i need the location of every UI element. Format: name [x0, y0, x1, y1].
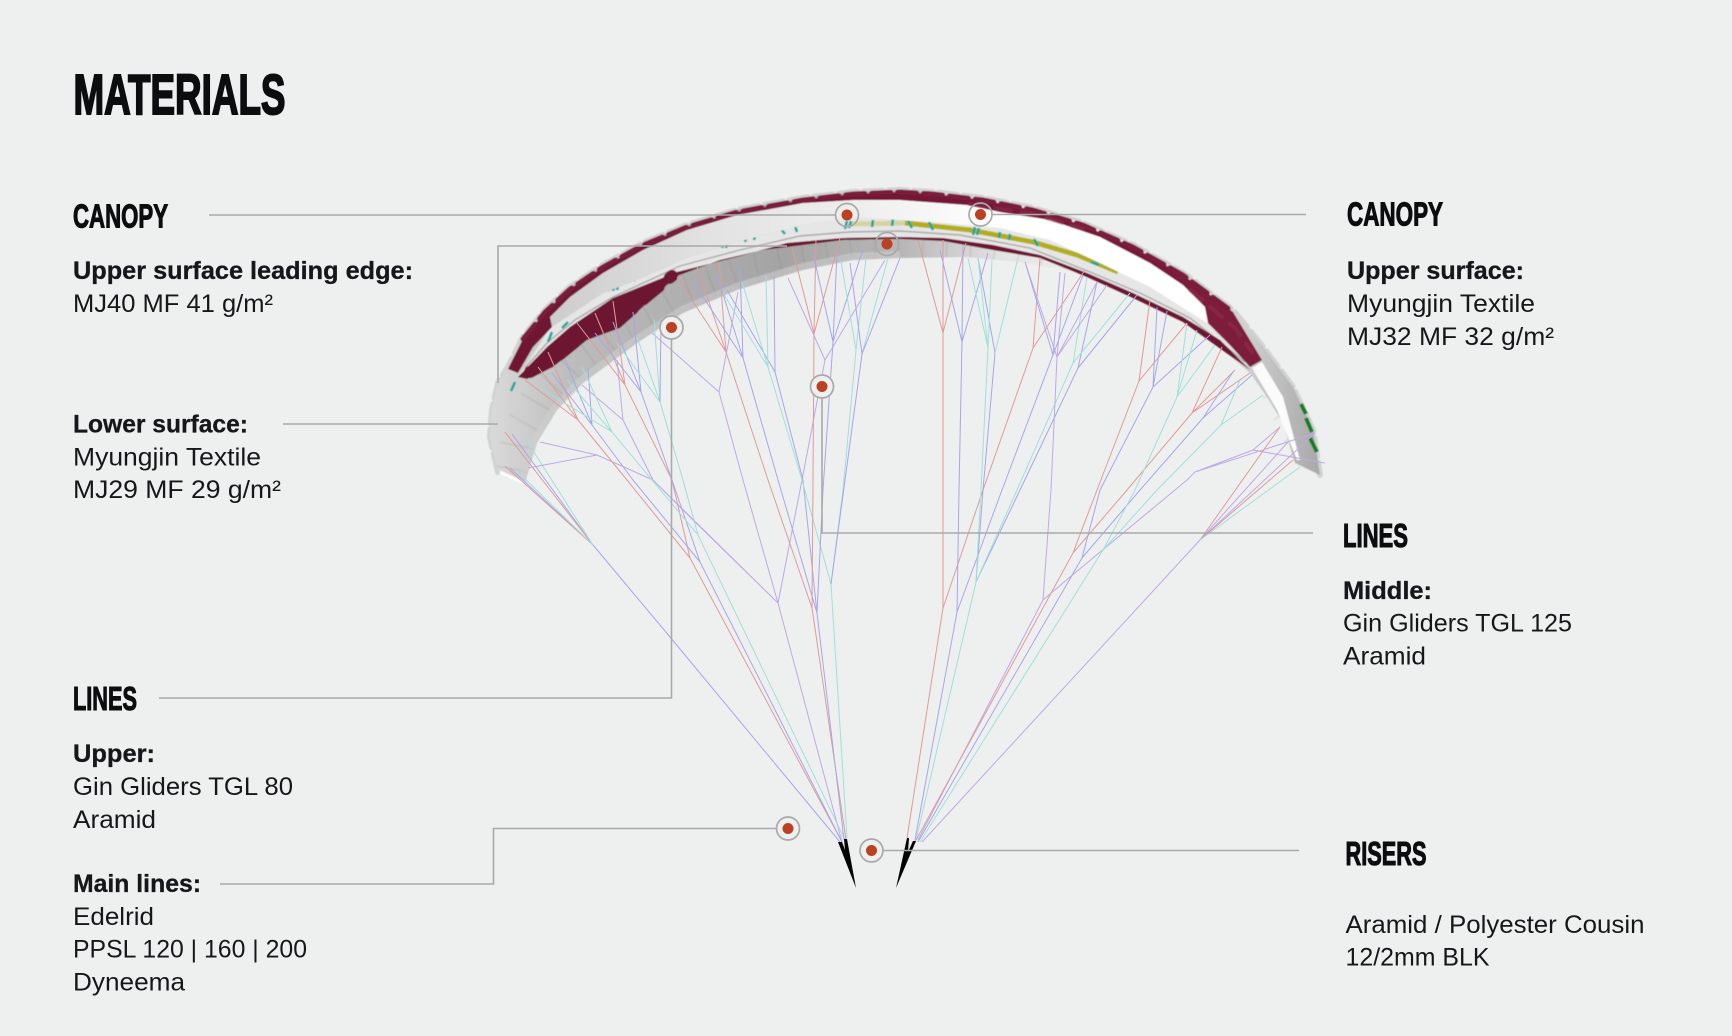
leader lines: [159, 214, 1313, 884]
text: risers material: Aramid / Polyester Cousin: [1346, 911, 1644, 939]
text: upper surface leading edge: Upper surface leading edge:: [73, 257, 413, 285]
lines: right group: [907, 240, 1325, 842]
text: main lines: Dyneema: [73, 968, 185, 996]
text: upper surface: Myungjin Textile: [1347, 290, 1535, 318]
marker: canopy leading edge: [836, 204, 858, 226]
text: lower surface: Myungjin Textile: [73, 444, 261, 472]
text: lower surface: MJ29 MF 29 g/m²: [73, 476, 281, 504]
panel: canopy left: [73, 198, 413, 504]
text: main lines: PPSL 120 | 160 | 200: [73, 936, 307, 964]
upper surface white panel: [550, 200, 1209, 328]
panel: risers: [1346, 835, 1644, 972]
marker: canopy upper surface: [969, 203, 992, 226]
paraglider canopy: [490, 190, 1320, 483]
heading: lines left: LINES: [73, 680, 137, 717]
canopy scalloped rim: [490, 190, 1320, 475]
text: upper lines: Gin Gliders TGL 80: [73, 773, 293, 801]
heading: canopy right: CANOPY: [1347, 196, 1443, 232]
teal marks: [511, 219, 1099, 391]
heading: risers: RISERS: [1346, 835, 1426, 872]
marker: risers: [860, 839, 883, 862]
text: main lines: Edelrid: [73, 903, 154, 931]
text: upper surface leading edge: MJ40 MF 41 g/m²: [73, 290, 273, 318]
title: MATERIALS: [74, 63, 286, 127]
marker: upper lines: [660, 316, 683, 339]
text: risers material: [1346, 911, 1644, 972]
panel: canopy right: [1347, 196, 1554, 351]
lines: left group: [505, 238, 900, 842]
wing tip green marks: [1301, 404, 1317, 452]
text: upper lines: Aramid: [73, 806, 156, 834]
text: risers material: 12/2mm BLK: [1346, 944, 1490, 972]
underside lower edge highlight: [530, 251, 900, 448]
maroon highlights right: [970, 204, 1252, 352]
left riser: [838, 839, 856, 888]
text: main lines: Main lines:: [73, 870, 201, 898]
lower maroon band: [518, 237, 1250, 379]
panel: lines left: [73, 680, 307, 996]
text: upper lines: [73, 740, 293, 834]
heading: canopy left: CANOPY: [73, 198, 168, 234]
text: upper surface: MJ32 MF 32 g/m²: [1347, 323, 1554, 351]
wing tip white strip right: [1252, 362, 1300, 460]
text: middle lines: Gin Gliders TGL 125: [1343, 610, 1572, 638]
marker: middle lines: [810, 375, 834, 398]
text: main lines: [73, 870, 307, 996]
right riser: [896, 838, 916, 888]
text: upper lines: Upper:: [73, 740, 155, 768]
wing tip left white edge: [500, 472, 524, 483]
upper maroon band: [508, 192, 1262, 373]
text: upper surface leading edge: [73, 257, 413, 318]
text: middle lines: [1343, 577, 1572, 670]
lower maroon scallops: [530, 276, 672, 372]
gold strip: right: [905, 223, 1118, 272]
middle strip: [518, 217, 1250, 377]
gold strip: left: [607, 223, 905, 290]
underside rib shading: [512, 248, 1290, 470]
maroon scallops: [523, 192, 1233, 339]
text: middle lines: Aramid: [1343, 642, 1426, 670]
text: lower surface: Lower surface:: [73, 410, 248, 438]
panel: lines right: [1343, 517, 1572, 670]
strip highlight lines: [525, 231, 1245, 368]
text: lower surface: [73, 410, 281, 504]
heading: lines right: LINES: [1343, 517, 1408, 554]
marker: canopy lower surface: [876, 232, 898, 256]
marker: main lines: [776, 817, 800, 840]
text: middle lines: Middle:: [1343, 577, 1432, 605]
text: upper surface: [1347, 257, 1554, 351]
canopy silhouette: [490, 190, 1320, 483]
text: upper surface: Upper surface:: [1347, 257, 1524, 285]
suspension lines: [505, 238, 1325, 842]
